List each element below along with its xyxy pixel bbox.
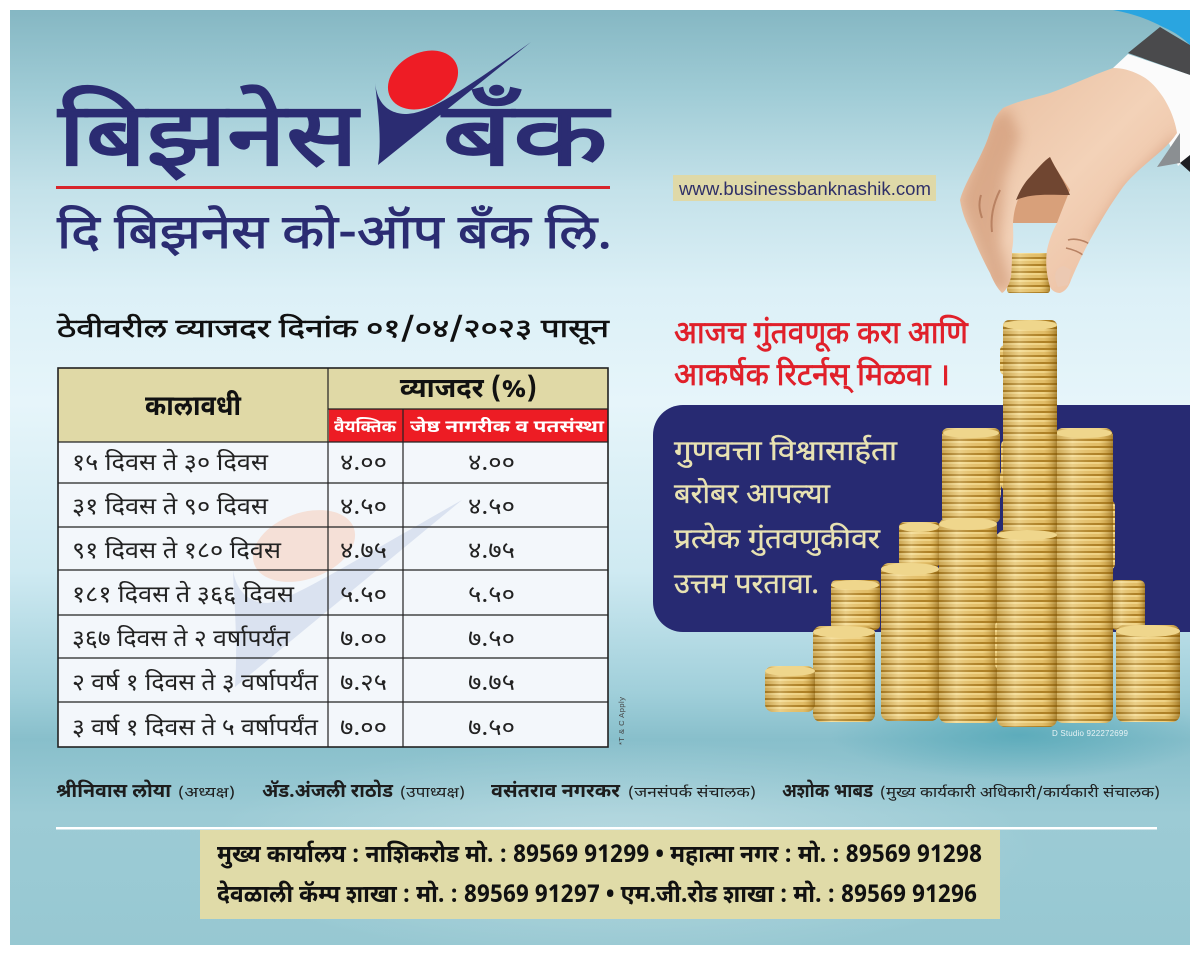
logo: business bank wordmark bbox=[56, 39, 612, 268]
row 1: ४.०० bbox=[340, 450, 387, 480]
navy callout: गुणवत्ता विश्वासार्हता bbox=[674, 434, 898, 472]
table header: individual: वैयक्तिक bbox=[334, 415, 397, 439]
row 7: ७.०० bbox=[340, 715, 387, 745]
row 5: ७.५० bbox=[468, 626, 515, 656]
logo word: bizness: बिझनेस bbox=[58, 85, 360, 201]
logo word: bank: बँक bbox=[442, 86, 610, 201]
row 4: ५.५० bbox=[340, 582, 387, 612]
row 7: ३ वर्ष १ दिवस ते ५ वर्षापर्यंत bbox=[72, 714, 319, 745]
illustration: coin stacks bbox=[765, 320, 1180, 727]
row 7 bbox=[72, 714, 515, 745]
credit: D Studio 922272699 bbox=[1052, 729, 1129, 738]
signatory 1 bbox=[56, 780, 235, 805]
signatory 2: (उपाध्यक्ष) bbox=[400, 784, 465, 803]
signatory 1: (अध्यक्ष) bbox=[178, 784, 235, 803]
front stacks bbox=[765, 518, 1180, 727]
table: interest rates bbox=[58, 368, 608, 747]
row 6: ७.७५ bbox=[468, 670, 515, 700]
row 6: २ वर्ष १ दिवस ते ३ वर्षापर्यंत bbox=[72, 669, 319, 700]
contact panel: देवळाली कॅम्प शाखा : मो. : 89569 91297 • एम.जी.रोड शाखा : मो. : 89569 91296 bbox=[217, 880, 977, 912]
signatory 2: ॲड.अंजली राठोड bbox=[262, 779, 394, 805]
row 5: ७.०० bbox=[340, 626, 387, 656]
coins in hand bbox=[1007, 253, 1050, 293]
signatory 3: (जनसंपर्क संचालक) bbox=[628, 784, 756, 803]
website: www.businessbanknashik.com bbox=[678, 179, 931, 199]
row 5 bbox=[72, 625, 515, 656]
row 2: ४.५० bbox=[340, 494, 387, 524]
row 2: ३१ दिवस ते ९० दिवस bbox=[72, 493, 268, 524]
table watermark bbox=[233, 497, 462, 687]
navy callout bbox=[653, 405, 1190, 632]
row 4: १८१ दिवस ते ३६६ दिवस bbox=[72, 581, 294, 612]
navy callout: प्रत्येक गुंतवणुकीवर bbox=[674, 522, 881, 560]
corner accent bbox=[1113, 10, 1190, 45]
row 1 bbox=[72, 449, 515, 480]
signatory 4: अशोक भाबड bbox=[782, 780, 874, 805]
navy callout: बरोबर आपल्या bbox=[674, 477, 831, 515]
signatory 4: (मुख्य कार्यकारी अधिकारी/कार्यकारी संचालक) bbox=[880, 784, 1160, 803]
red rule bbox=[56, 186, 610, 189]
row 3 bbox=[72, 537, 515, 568]
table header: rate: व्याजदर (%) bbox=[399, 374, 537, 409]
promo text bbox=[674, 315, 969, 398]
sleeve bbox=[1128, 27, 1190, 75]
row 4: ५.५० bbox=[468, 582, 515, 612]
hand bbox=[960, 68, 1177, 293]
heading: interest rate date: ठेवीवरील व्याजदर दिनांक ०१/०४/२०२३ पासून bbox=[57, 313, 610, 348]
row 7: ७.५० bbox=[468, 715, 515, 745]
row 3: ९१ दिवस ते १८० दिवस bbox=[72, 537, 281, 568]
row 6: ७.२५ bbox=[340, 670, 387, 700]
signatory 3 bbox=[491, 780, 756, 805]
signatory 2 bbox=[262, 779, 465, 805]
signatory 3: वसंतराव नगरकर bbox=[491, 780, 621, 805]
signatory 1: श्रीनिवास लोया bbox=[56, 780, 171, 805]
logo mark: tick swoosh bbox=[375, 42, 531, 165]
promo text: आजच गुंतवणूक करा आणि bbox=[674, 315, 969, 356]
row 1: ४.०० bbox=[468, 450, 515, 480]
signatories bbox=[56, 779, 1160, 805]
row 3: ४.७५ bbox=[340, 538, 387, 568]
contact panel: मुख्य कार्यालय : नाशिकरोड मो. : 89569 91299 • महात्मा नगर : मो. : 89569 91298 bbox=[217, 840, 982, 872]
row 2: ४.५० bbox=[468, 494, 515, 524]
contact panel bbox=[200, 830, 1000, 919]
illustration: hand holding coins bbox=[950, 10, 1190, 300]
logo subtitle: दि बिझनेस को-ऑप बँक लि. bbox=[57, 205, 612, 268]
navy callout: उत्तम परतावा. bbox=[674, 569, 819, 605]
promo text: आकर्षक रिटर्नस् मिळवा । bbox=[674, 357, 950, 398]
signatory 4 bbox=[782, 780, 1160, 805]
row 4 bbox=[72, 581, 515, 612]
logo mark: red disc bbox=[378, 39, 468, 121]
back stacks bbox=[831, 320, 1145, 723]
table header: senior citizens: जेष्ठ नागरीक व पतसंस्था bbox=[410, 416, 605, 439]
row 6 bbox=[72, 669, 515, 700]
row 3: ४.७५ bbox=[468, 538, 515, 568]
row 1: १५ दिवस ते ३० दिवस bbox=[72, 449, 268, 480]
row 2 bbox=[72, 493, 515, 524]
cuff bbox=[1113, 54, 1190, 166]
terms note: *T & C Apply bbox=[617, 697, 626, 745]
row 5: ३६७ दिवस ते २ वर्षापर्यंत bbox=[72, 625, 291, 656]
table header: period: कालावधी bbox=[145, 389, 242, 427]
